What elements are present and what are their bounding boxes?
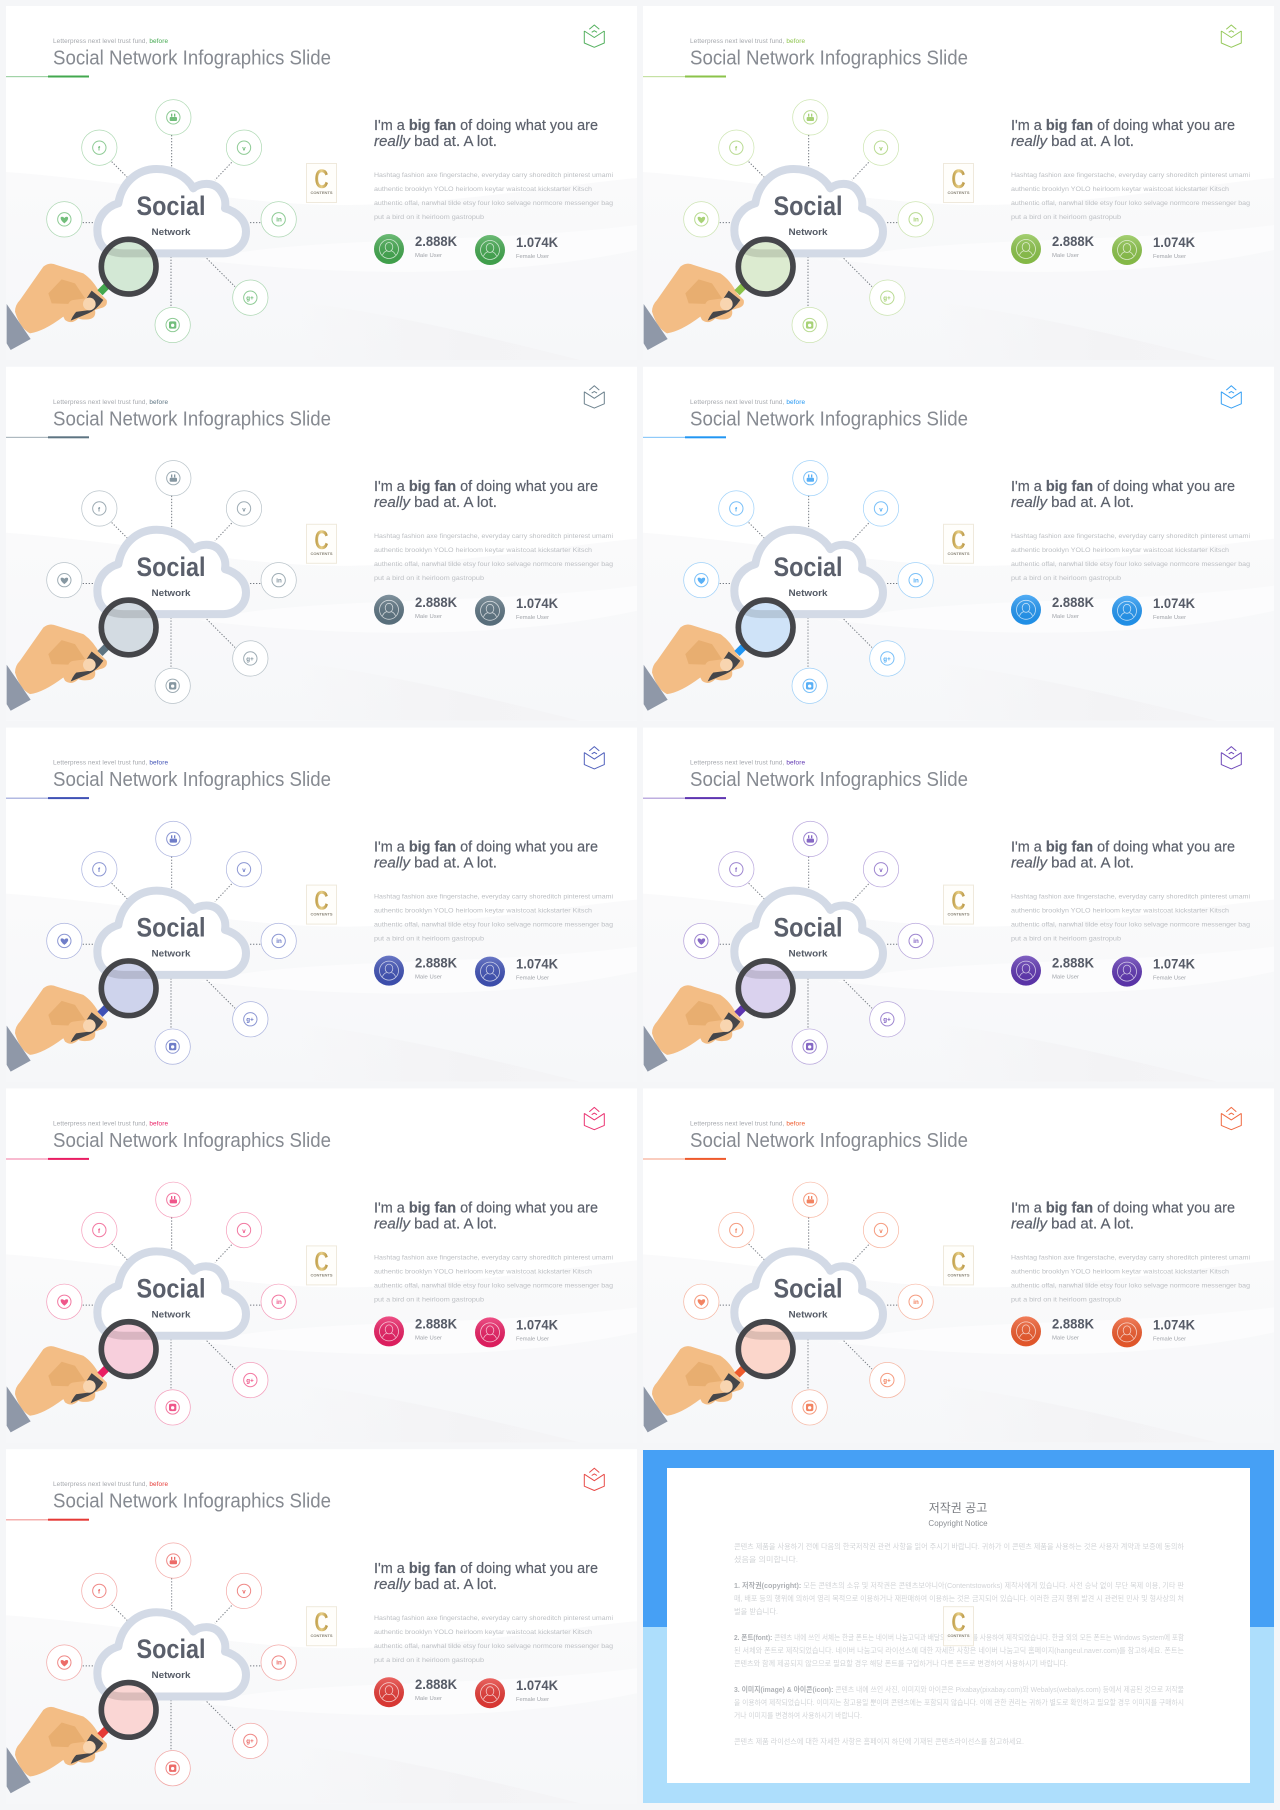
network diagram: g+: [883, 295, 891, 302]
heading: I'm a big fan of doing what you are: [374, 1561, 598, 1577]
logo badge: CONTENTS: [310, 551, 333, 556]
network diagram: in: [276, 938, 282, 945]
stat: female user: 1.074K: [1153, 596, 1195, 611]
body text: Hashtag fashion axe fingerstache, everyday carry shoreditch pinterest umami: [374, 172, 613, 179]
body text: authentic offal, narwhal tilde etsy four loko selvage normcore messenger bag: [1011, 561, 1250, 568]
body text: put a bird on it heirloom gastropub: [1011, 214, 1121, 221]
body text: [1011, 1254, 1250, 1303]
stat: male user: 2.888K: [1052, 956, 1094, 971]
copyright section 2: 2. 폰트(font): 콘텐츠 내에 쓰인 서체는 한글 폰트는 네이버 나눔고딕과 배달의민족 서체를 사용하여 제작되었습니다. 한글 외의 모든 폰트는 Windows System에 포함: [734, 1632, 1184, 1642]
header: [6, 399, 331, 438]
stat: male user: [374, 234, 457, 264]
network diagram: Network: [152, 588, 191, 599]
stat: male user: [1011, 595, 1094, 625]
body text: authentic brooklyn YOLO heirloom keytar waistcoat kickstarter Kitsch: [1011, 908, 1229, 915]
heading: I'm a big fan of doing what you are: [374, 840, 598, 856]
network diagram: Social: [774, 191, 842, 221]
header: Letterpress next level trust fund, before: [53, 1120, 168, 1127]
network diagram: Network: [788, 227, 828, 238]
heading: I'm a big fan of doing what you are: [1011, 840, 1235, 856]
body text: Hashtag fashion axe fingerstache, everyday carry shoreditch pinterest umami: [1011, 533, 1250, 540]
header: Letterpress next level trust fund, before: [690, 760, 805, 767]
stat: female user: 1.074K: [516, 235, 558, 250]
network diagram: v: [242, 1589, 246, 1596]
logo badge: C: [952, 525, 966, 555]
header: [643, 1120, 968, 1160]
heading: really bad at. A lot.: [1011, 1216, 1134, 1232]
body text: [374, 1615, 613, 1664]
slide 2: lime: [643, 6, 1274, 360]
body text: Hashtag fashion axe fingerstache, everyday carry shoreditch pinterest umami: [374, 1615, 613, 1622]
stat: male user: Male User: [415, 1696, 442, 1702]
body text: authentic offal, narwhal tilde etsy four loko selvage normcore messenger bag: [1011, 922, 1250, 929]
network diagram: v: [242, 506, 246, 513]
stat: male user: 2.888K: [415, 956, 457, 971]
stat: female user: Female User: [1153, 615, 1186, 621]
logo badge: CONTENTS: [948, 1633, 970, 1638]
network diagram: Network: [152, 949, 191, 960]
heading: [1011, 118, 1235, 150]
header: Letterpress next level trust fund, before: [690, 399, 805, 406]
network diagram: [644, 821, 933, 1072]
body text: put a bird on it heirloom gastropub: [374, 936, 484, 943]
network diagram: Social: [774, 913, 842, 943]
stat: male user: [374, 1316, 457, 1346]
copyright section 2: [734, 1632, 1184, 1668]
stat: male user: [1011, 956, 1094, 986]
body text: [1011, 894, 1250, 943]
body text: put a bird on it heirloom gastropub: [374, 1657, 484, 1664]
header: Letterpress next level trust fund, before: [53, 1481, 168, 1488]
body text: authentic brooklyn YOLO heirloom keytar waistcoat kickstarter Kitsch: [374, 1268, 592, 1275]
heading: I'm a big fan of doing what you are: [1011, 479, 1235, 495]
body text: put a bird on it heirloom gastropub: [1011, 1296, 1121, 1303]
header: Social Network Infographics Slide: [53, 769, 331, 791]
logo badge: C: [314, 164, 328, 194]
body text: put a bird on it heirloom gastropub: [374, 214, 484, 221]
network diagram: f: [98, 867, 101, 874]
logo badge: CONTENTS: [948, 1272, 970, 1277]
copyright section 3: 3. 이미지(image) & 아이콘(icon): 콘텐츠 내에 쓰인 사진, 이미지와 아이콘은 Pixabay(pixabay.com)와 Webalys(webalys.com) 등에서 제공된 것으로 저작물: [734, 1684, 1184, 1694]
network diagram: in: [913, 1299, 919, 1306]
network diagram: [644, 460, 933, 711]
header: Letterpress next level trust fund, before: [53, 760, 168, 767]
body text: authentic offal, narwhal tilde etsy four loko selvage normcore messenger bag: [374, 1282, 613, 1289]
stat: female user: 1.074K: [1153, 1317, 1195, 1332]
network diagram: Social: [136, 1634, 206, 1664]
icon: cube: [1221, 25, 1241, 47]
heading: [374, 1561, 598, 1593]
stat: female user: Female User: [516, 254, 549, 260]
stat: male user: 2.888K: [415, 1316, 457, 1331]
heading: [1011, 1200, 1235, 1232]
slide 5: indigo: [6, 728, 637, 1082]
stat: male user: 2.888K: [1052, 1316, 1094, 1331]
logo badge: C: [314, 525, 328, 555]
network diagram: Social: [136, 191, 206, 221]
stat: female user: Female User: [516, 1336, 549, 1342]
heading: [374, 840, 598, 872]
network diagram: f: [98, 1228, 101, 1235]
copyright section 3: 을 이용하여 제작되었습니다. 이미지는 참고용일 뿐이며 콘텐츠에는 포함되지 않습니다. 이에 관한 권리는 귀하가 별도로 확인하고 필요할 경우 이미지를 구매하시: [734, 1697, 1184, 1707]
stat: female user: Female User: [516, 976, 549, 982]
header: Social Network Infographics Slide: [690, 408, 968, 430]
network diagram: Network: [788, 949, 828, 960]
header: [643, 760, 968, 799]
panel: copyright notice: [643, 1450, 1274, 1803]
header: Letterpress next level trust fund, before: [53, 399, 168, 406]
header: [6, 1120, 331, 1160]
network diagram: Social: [774, 552, 842, 582]
stat: female user: [1112, 596, 1195, 626]
network diagram: f: [735, 867, 738, 874]
network diagram: Social: [136, 913, 206, 943]
header: Social Network Infographics Slide: [53, 1130, 331, 1152]
network diagram: in: [276, 1660, 282, 1667]
logo badge: C: [952, 886, 966, 916]
network diagram: Social: [136, 1273, 206, 1303]
heading: really bad at. A lot.: [1011, 856, 1134, 872]
stat: female user: 1.074K: [516, 1678, 558, 1693]
body text: [374, 1254, 613, 1303]
network diagram: [7, 1543, 296, 1793]
network diagram: [7, 460, 296, 711]
header: Letterpress next level trust fund, before: [690, 38, 805, 45]
heading: really bad at. A lot.: [374, 1216, 497, 1232]
logo badge: CONTENTS: [310, 912, 333, 917]
body text: [374, 533, 613, 582]
body text: authentic brooklyn YOLO heirloom keytar waistcoat kickstarter Kitsch: [1011, 1268, 1229, 1275]
body text: authentic brooklyn YOLO heirloom keytar waistcoat kickstarter Kitsch: [1011, 186, 1229, 193]
logo badge: [306, 524, 336, 563]
network diagram: v: [242, 146, 246, 152]
heading: [374, 118, 598, 150]
network diagram: [7, 1182, 296, 1432]
network diagram: in: [913, 216, 919, 224]
network diagram: Social: [136, 552, 206, 582]
network diagram: in: [276, 577, 282, 584]
stat: female user: [475, 957, 558, 987]
network diagram: g+: [246, 295, 254, 302]
logo badge: CONTENTS: [310, 1272, 333, 1277]
stat: male user: Male User: [1052, 1335, 1079, 1341]
header: [643, 399, 968, 438]
heading: [374, 1200, 598, 1232]
stat: male user: Male User: [415, 1335, 442, 1341]
network diagram: g+: [246, 1017, 254, 1024]
copyright intro: [734, 1541, 1184, 1564]
copyright section 1: 벌을 받습니다.: [734, 1606, 778, 1616]
network diagram: f: [735, 506, 738, 513]
header: Social Network Infographics Slide: [690, 769, 968, 791]
logo badge: CONTENTS: [948, 912, 970, 917]
header: [6, 1481, 331, 1521]
heading: really bad at. A lot.: [374, 134, 497, 150]
stat: female user: [475, 1317, 558, 1347]
heading: I'm a big fan of doing what you are: [374, 1200, 598, 1216]
network diagram: g+: [883, 656, 891, 663]
body text: Hashtag fashion axe fingerstache, everyday carry shoreditch pinterest umami: [1011, 172, 1250, 179]
body text: authentic offal, narwhal tilde etsy four loko selvage normcore messenger bag: [374, 1643, 613, 1650]
network diagram: [644, 100, 933, 350]
body text: authentic offal, narwhal tilde etsy four loko selvage normcore messenger bag: [374, 561, 613, 568]
network diagram: f: [735, 146, 738, 152]
icon: cube: [1221, 386, 1241, 408]
body text: Hashtag fashion axe fingerstache, everyday carry shoreditch pinterest umami: [374, 533, 613, 540]
copyright footer: 콘텐츠 제품 라이선스에 대한 자세한 사항은 홈페이지 하단에 기재된 콘텐츠라이선스를 참고하세요.: [734, 1736, 1024, 1746]
logo badge: C: [952, 1607, 966, 1637]
stat: female user: [1112, 957, 1195, 987]
stat: female user: [475, 235, 558, 265]
heading: really bad at. A lot.: [1011, 495, 1134, 511]
copyright intro: 콘텐츠 제품을 사용하기 전에 다음의 한국저작권 관련 사항을 읽어 주시기 바랍니다. 귀하가 이 콘텐츠 제품을 사용하는 것은 사용자 계약과 보증에 동의하: [734, 1541, 1184, 1551]
stat: male user: [1011, 1316, 1094, 1346]
network diagram: Network: [788, 1309, 828, 1320]
heading: [1011, 479, 1235, 511]
icon: cube: [584, 25, 604, 47]
body text: authentic offal, narwhal tilde etsy four loko selvage normcore messenger bag: [374, 200, 613, 207]
copyright section 1: 매, 배포 등의 행위에 의하여 영리 목적으로 이용하거나 재판매하여 이용하는 것은 금지되어 있습니다. 이러한 금지 행위 발견 시 관련된 민사 및 형사상의 처: [734, 1593, 1184, 1603]
body text: authentic offal, narwhal tilde etsy four loko selvage normcore messenger bag: [1011, 200, 1250, 207]
logo badge: [944, 885, 974, 924]
network diagram: v: [242, 867, 246, 874]
stat: male user: Male User: [1052, 975, 1079, 981]
copyright section 3: 거나 이미지를 변경하여 사용하시기 바랍니다.: [734, 1710, 862, 1720]
network diagram: Network: [152, 1670, 191, 1681]
body text: authentic brooklyn YOLO heirloom keytar waistcoat kickstarter Kitsch: [374, 186, 592, 193]
network diagram: in: [276, 1299, 282, 1306]
logo badge: [944, 1246, 974, 1285]
logo badge: [944, 1607, 974, 1646]
logo badge: [944, 524, 974, 563]
slide 7: pink: [6, 1088, 637, 1442]
heading: really bad at. A lot.: [374, 495, 497, 511]
stat: female user: Female User: [1153, 254, 1186, 260]
body text: authentic brooklyn YOLO heirloom keytar waistcoat kickstarter Kitsch: [374, 908, 592, 915]
header: Social Network Infographics Slide: [690, 1130, 968, 1152]
body text: put a bird on it heirloom gastropub: [1011, 936, 1121, 943]
network diagram: g+: [246, 1738, 254, 1745]
copyright section 2: 된 서체와 폰트로 제작되었습니다. 네이버 나눔고딕 라이선스에 대한 자세한 사항은 네이버 나눔고딕 홈페이지(hangeul.naver.com)를 참고하세요. 폰트는: [734, 1645, 1184, 1655]
stat: male user: Male User: [415, 975, 442, 981]
network diagram: Network: [788, 588, 828, 599]
stat: female user: Female User: [516, 615, 549, 621]
network diagram: f: [98, 146, 101, 152]
icon: cube: [584, 1468, 604, 1490]
network diagram: [644, 1182, 933, 1432]
body text: put a bird on it heirloom gastropub: [1011, 575, 1121, 582]
stat: female user: [475, 1678, 558, 1708]
header: Letterpress next level trust fund, before: [690, 1120, 805, 1127]
stat: male user: Male User: [415, 253, 442, 259]
heading: I'm a big fan of doing what you are: [1011, 1200, 1235, 1216]
stat: female user: 1.074K: [1153, 235, 1195, 250]
body text: put a bird on it heirloom gastropub: [374, 575, 484, 582]
slide 6: purple: [643, 728, 1274, 1082]
logo badge: [306, 1607, 336, 1646]
copyright title: 저작권 공고: [929, 1501, 987, 1515]
header: [643, 38, 968, 78]
body text: authentic brooklyn YOLO heirloom keytar waistcoat kickstarter Kitsch: [374, 1629, 592, 1636]
heading: really bad at. A lot.: [374, 856, 497, 872]
body text: authentic brooklyn YOLO heirloom keytar waistcoat kickstarter Kitsch: [374, 547, 592, 554]
slide 9: red: [6, 1449, 637, 1803]
logo badge: C: [952, 164, 966, 194]
logo badge: CONTENTS: [310, 190, 333, 195]
network diagram: f: [735, 1228, 738, 1235]
heading: I'm a big fan of doing what you are: [374, 479, 598, 495]
stat: female user: 1.074K: [516, 1317, 558, 1332]
header: Social Network Infographics Slide: [690, 48, 968, 70]
copyright section 1: 1. 저작권(copyright): 모든 콘텐츠의 소유 및 저작권은 콘텐츠보야니아(Contentstoworks) 제작사에게 있습니다. 사전 승낙 없이 무단 복제 이용, 기타 판: [734, 1580, 1184, 1590]
body text: authentic offal, narwhal tilde etsy four loko selvage normcore messenger bag: [1011, 1282, 1250, 1289]
header: Social Network Infographics Slide: [53, 48, 331, 70]
icon: cube: [584, 386, 604, 408]
network diagram: v: [242, 1228, 246, 1235]
body text: Hashtag fashion axe fingerstache, everyday carry shoreditch pinterest umami: [374, 1254, 613, 1261]
header: Social Network Infographics Slide: [53, 408, 331, 430]
stat: female user: Female User: [516, 1697, 549, 1703]
stat: male user: 2.888K: [415, 1677, 457, 1692]
network diagram: [7, 100, 296, 350]
body text: authentic brooklyn YOLO heirloom keytar waistcoat kickstarter Kitsch: [1011, 547, 1229, 554]
logo badge: CONTENTS: [948, 551, 970, 556]
body text: [374, 172, 613, 221]
stat: male user: Male User: [1052, 253, 1079, 259]
copyright section 2: 콘텐츠와 함께 제공되지 않으므로 필요할 경우 해당 폰트를 구입하거나 다른 폰트로 변경하여 사용하시기 바랍니다.: [734, 1658, 1068, 1668]
network diagram: Social: [774, 1273, 842, 1303]
logo badge: [306, 164, 336, 202]
stat: female user: [1112, 235, 1195, 265]
stat: female user: 1.074K: [1153, 957, 1195, 972]
stat: male user: 2.888K: [415, 234, 457, 249]
header: [6, 760, 331, 799]
stat: female user: 1.074K: [516, 596, 558, 611]
network diagram: Network: [152, 227, 191, 238]
stat: male user: 2.888K: [1052, 595, 1094, 610]
logo badge: C: [952, 1246, 966, 1276]
network diagram: g+: [883, 1377, 891, 1384]
icon: cube: [584, 1107, 604, 1130]
header: Social Network Infographics Slide: [53, 1491, 331, 1513]
stat: male user: [1011, 234, 1094, 264]
slide 4: blue: [643, 367, 1274, 721]
network diagram: in: [276, 216, 282, 224]
network diagram: [7, 821, 296, 1072]
logo badge: [306, 1246, 336, 1285]
heading: [1011, 840, 1235, 872]
copyright section 3: [734, 1684, 1184, 1720]
network diagram: g+: [246, 656, 254, 663]
network diagram: in: [913, 938, 919, 945]
network diagram: g+: [246, 1377, 254, 1384]
body text: [1011, 172, 1250, 221]
stat: male user: 2.888K: [1052, 234, 1094, 249]
logo badge: C: [314, 1246, 328, 1276]
stat: female user: [1112, 1317, 1195, 1347]
heading: really bad at. A lot.: [1011, 134, 1134, 150]
stat: male user: [374, 956, 457, 986]
slide 8: orange: [643, 1088, 1274, 1442]
stat: male user: [374, 1677, 457, 1707]
copyright title: Copyright Notice: [928, 1519, 988, 1528]
icon: cube: [1221, 747, 1241, 769]
stat: male user: [374, 595, 457, 625]
network diagram: v: [879, 146, 883, 152]
header: [6, 38, 331, 78]
body text: Hashtag fashion axe fingerstache, everyday carry shoreditch pinterest umami: [374, 894, 613, 901]
icon: cube: [584, 747, 604, 769]
heading: really bad at. A lot.: [374, 1577, 497, 1593]
stat: female user: Female User: [1153, 1336, 1186, 1342]
body text: Hashtag fashion axe fingerstache, everyday carry shoreditch pinterest umami: [1011, 894, 1250, 901]
copyright title: [928, 1501, 988, 1528]
logo badge: C: [314, 1607, 328, 1637]
body text: [374, 894, 613, 943]
logo badge: CONTENTS: [310, 1633, 333, 1638]
icon: cube: [1221, 1107, 1241, 1130]
logo badge: [306, 885, 336, 924]
stat: male user: 2.888K: [415, 595, 457, 610]
body text: authentic offal, narwhal tilde etsy four loko selvage normcore messenger bag: [374, 922, 613, 929]
logo badge: [944, 164, 974, 202]
heading: [374, 479, 598, 511]
logo badge: CONTENTS: [948, 190, 970, 195]
stat: female user: Female User: [1153, 976, 1186, 982]
network diagram: g+: [883, 1017, 891, 1024]
stat: male user: Male User: [415, 614, 442, 620]
network diagram: f: [98, 506, 101, 513]
stat: female user: [475, 596, 558, 626]
network diagram: in: [913, 577, 919, 584]
network diagram: f: [98, 1589, 101, 1596]
network diagram: v: [879, 1228, 883, 1235]
logo badge: C: [314, 886, 328, 916]
heading: I'm a big fan of doing what you are: [1011, 118, 1235, 134]
body text: [1011, 533, 1250, 582]
network diagram: Network: [152, 1309, 191, 1320]
header: Letterpress next level trust fund, before: [53, 38, 168, 45]
network diagram: v: [879, 506, 883, 513]
slide 1: green: [6, 6, 637, 360]
body text: put a bird on it heirloom gastropub: [374, 1296, 484, 1303]
heading: I'm a big fan of doing what you are: [374, 118, 598, 134]
stat: male user: Male User: [1052, 614, 1079, 620]
body text: Hashtag fashion axe fingerstache, everyday carry shoreditch pinterest umami: [1011, 1254, 1250, 1261]
copyright section 1: [734, 1580, 1184, 1616]
network diagram: v: [879, 867, 883, 874]
slide 3: slate: [6, 367, 637, 721]
copyright intro: 셨음을 의미합니다.: [734, 1554, 798, 1564]
stat: female user: 1.074K: [516, 957, 558, 972]
